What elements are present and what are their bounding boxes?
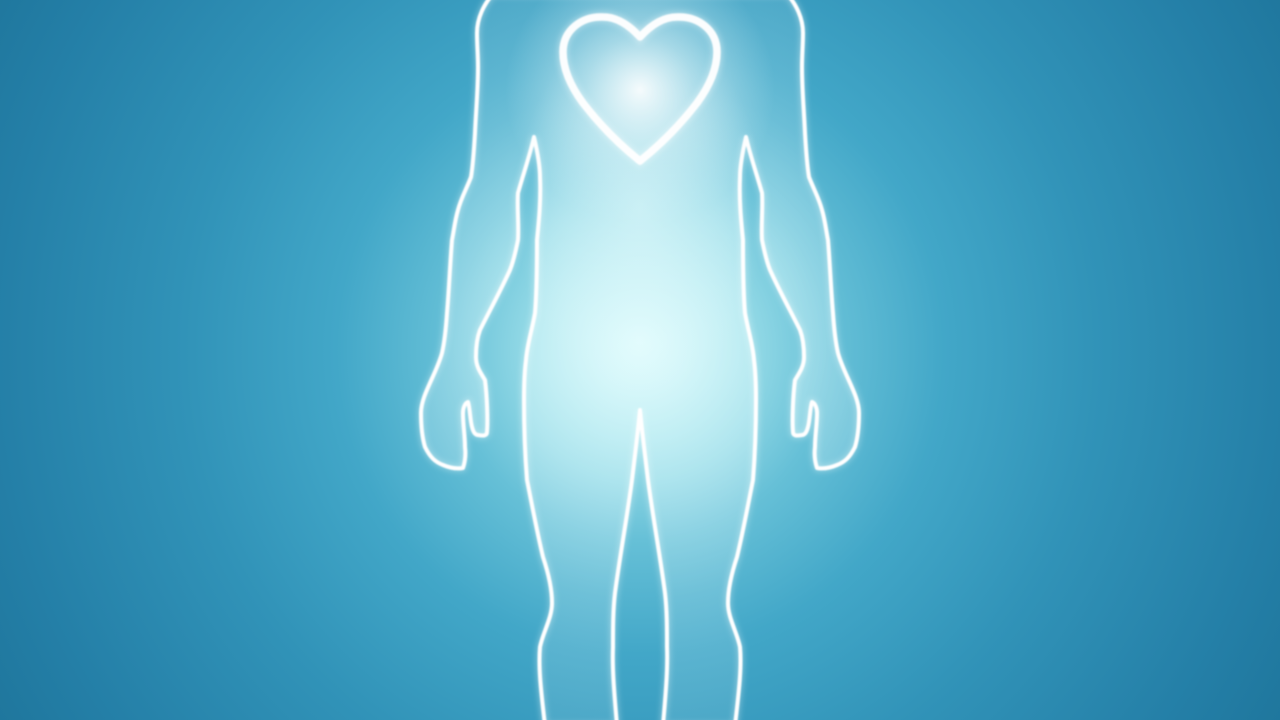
heart icon <box>505 0 775 225</box>
body silhouette <box>421 0 859 720</box>
